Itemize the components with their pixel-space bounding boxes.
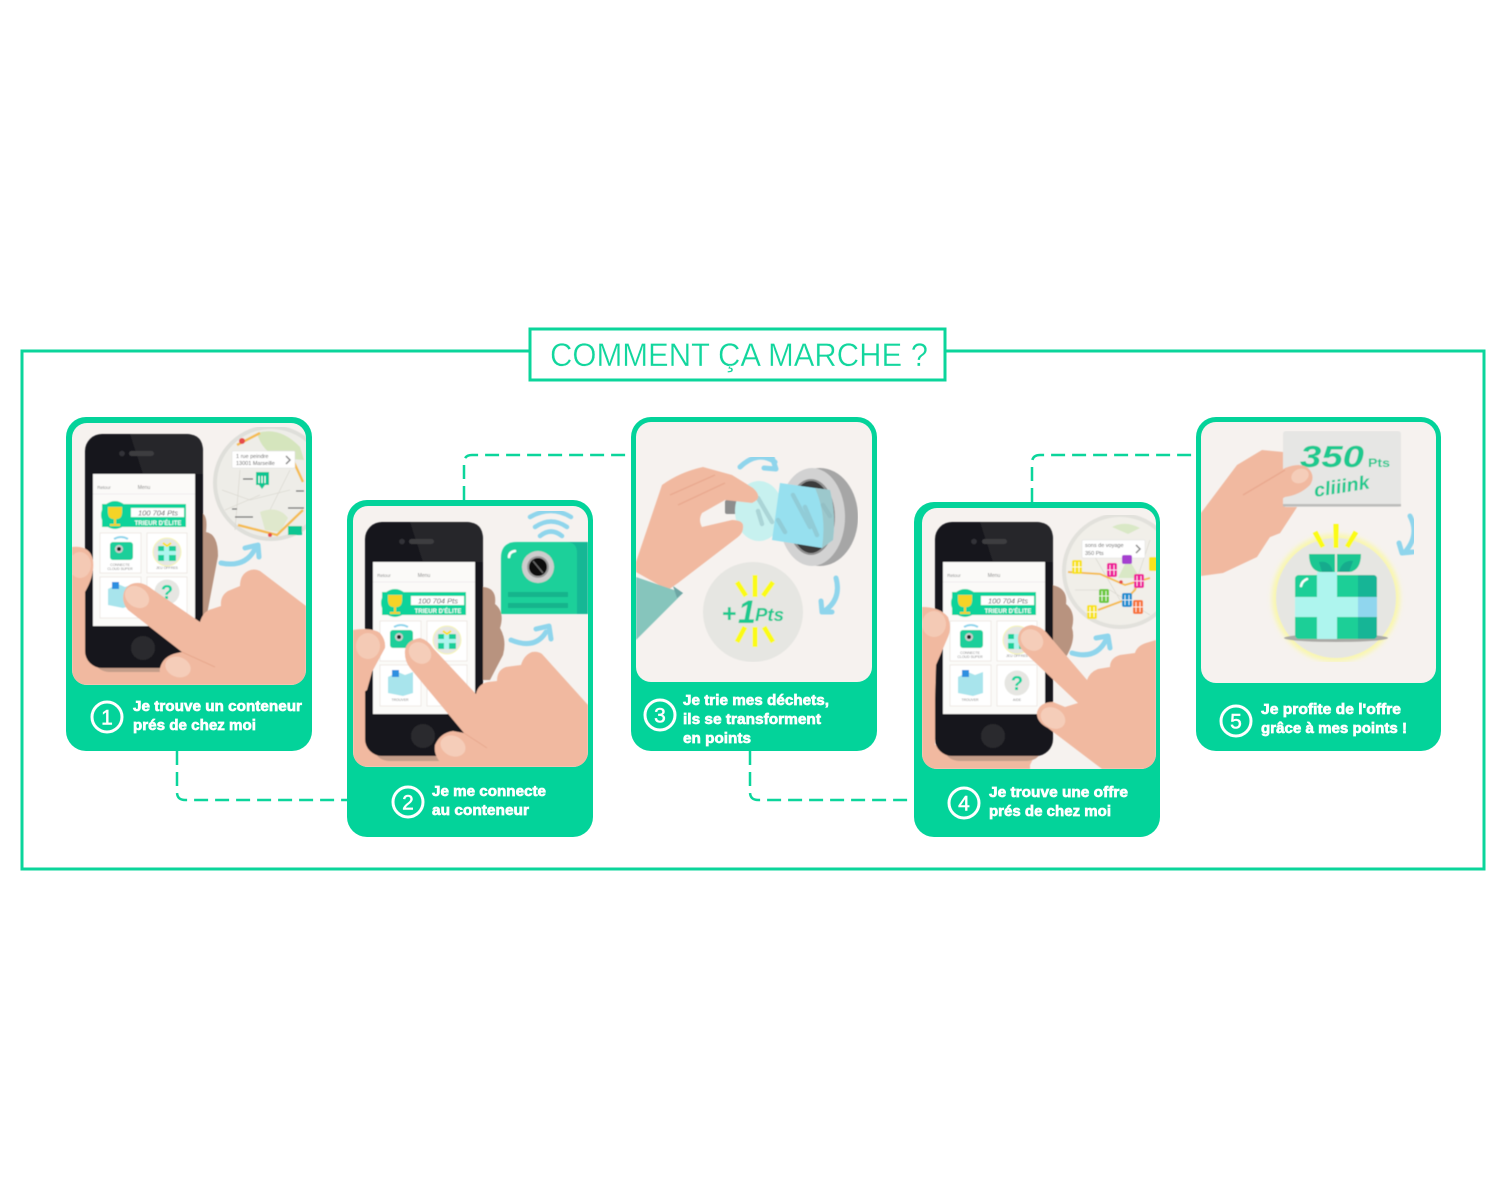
step 2 caption: au conteneur: [432, 803, 529, 819]
map pins: [1072, 555, 1159, 619]
illustration: phone and offers map: AIDE: [1013, 698, 1022, 702]
step 5 caption: grâce à mes points !: [1261, 721, 1407, 737]
step 2 number: [393, 787, 423, 817]
step 4 number: [949, 788, 979, 818]
step 2 number: 2: [402, 792, 414, 814]
illustration: phone and map: CONNECTE: [110, 563, 130, 567]
points badge: [703, 562, 803, 662]
illustration: phone and offers map: TROUVER: [961, 698, 979, 702]
points card: Pts: [1368, 456, 1390, 470]
panel: step 3: [631, 417, 877, 751]
icon: container: [501, 542, 588, 614]
panel: step 2: [347, 500, 593, 837]
step 3 number: [645, 700, 675, 730]
container slot: [779, 468, 858, 566]
illustration: phone and offers map: CONNECTE: [960, 651, 980, 655]
illustration: phone and map: Retour: [97, 485, 111, 490]
connector: step 4 to step 5: [1032, 455, 1196, 502]
illustration: phone and map: JEU OFFRES: [156, 566, 179, 570]
illustration: phone and offers map: Menu: [988, 573, 1000, 579]
illustration: phone and map: 1 rue peindre: [236, 454, 268, 460]
illustration: phone and container: Menu: [418, 573, 430, 579]
connector: step 3 to step 4: [750, 751, 914, 800]
connector: step 2 to step 3: [464, 455, 631, 500]
thumb: [1243, 464, 1313, 498]
illustration: phone and offers map: CLOUD SUPER: [957, 655, 983, 659]
step 5 number: [1221, 706, 1251, 736]
illustration: phone and container: [353, 511, 588, 767]
step 1 number: [92, 702, 122, 732]
step 3 caption: ils se transforment: [683, 712, 821, 728]
illustration: sorting bottle: [636, 457, 858, 662]
outer frame: [22, 351, 1484, 869]
illustration: phone and offers map: TRIEUR D'ÉLITE: [985, 607, 1031, 615]
panel: step 4: [914, 502, 1176, 837]
illustration: phone and offers map: sons de voyage: [1085, 543, 1124, 549]
illustration: phone and container: AIDE: [443, 698, 452, 702]
illustration: phone and offers map: Retour: [947, 573, 961, 578]
illustration: phone and map: [69, 427, 327, 685]
illustration: phone and map: TRIEUR D'ÉLITE: [135, 519, 181, 527]
illustration: phone and map: 100 704 Pts: [138, 508, 178, 518]
illustration: phone and container: TRIEUR D'ÉLITE: [415, 607, 461, 615]
step 4 caption: [989, 785, 1128, 820]
illustration: phone and container: 100 704 Pts: [418, 596, 458, 606]
gift: [1272, 524, 1400, 662]
step 5 number: 5: [1230, 710, 1242, 734]
step 3 number: 3: [654, 704, 666, 728]
points badge: +: [722, 600, 737, 628]
step 4 caption: Je trouve une offre: [989, 785, 1128, 801]
step 4 caption: prés de chez moi: [989, 804, 1111, 820]
illustration: phone and map: ?: [161, 582, 173, 604]
illustration: phone and offers map: JEU OFFRES: [1006, 654, 1029, 658]
illustration: phone and offers map: [922, 515, 1176, 769]
step 5 caption: [1261, 702, 1407, 737]
points card: [1283, 431, 1401, 507]
step 5 caption: Je profite de l'offre: [1261, 702, 1401, 718]
step 3 caption: [683, 693, 829, 747]
step 2 caption: [432, 784, 546, 819]
step 2 caption: Je me connecte: [432, 784, 546, 800]
illustration: phone and map: Menu: [138, 485, 150, 491]
icon: wifi waves: [530, 511, 571, 536]
step 4 number: 4: [958, 792, 970, 816]
step 1 caption: prés de chez moi: [133, 718, 256, 734]
panel: step 1: [66, 417, 327, 751]
illustration: phone and offers map: 100 704 Pts: [988, 596, 1028, 606]
title: COMMENT ÇA MARCHE ?: [550, 337, 928, 373]
panel: step 5: [1196, 417, 1441, 751]
illustration: phone and map: 13001 Marseille: [236, 461, 275, 467]
step 1 caption: [133, 699, 302, 734]
points card: cliiink: [1312, 472, 1373, 502]
illustration: phone and offers map: ?: [1011, 673, 1023, 695]
title: [530, 329, 945, 380]
bottle: [725, 481, 834, 548]
points badge: 1: [738, 594, 756, 630]
illustration: phone and container: Retour: [377, 573, 391, 578]
illustration: card and gift: [1201, 431, 1414, 662]
points card: 350: [1300, 439, 1364, 474]
illustration: phone and offers map: 350 Pts: [1085, 551, 1104, 557]
points badge: Pts: [755, 605, 784, 625]
step 3 caption: Je trie mes déchets,: [683, 693, 829, 709]
illustration: phone and map: CLOUD SUPER: [107, 567, 133, 571]
step 3 caption: en points: [683, 731, 751, 747]
illustration: phone and container: TROUVER: [391, 698, 409, 702]
step 1 caption: Je trouve un conteneur: [133, 699, 302, 715]
connector: step 1 to step 2: [177, 751, 347, 800]
step 1 number: 1: [101, 706, 113, 730]
